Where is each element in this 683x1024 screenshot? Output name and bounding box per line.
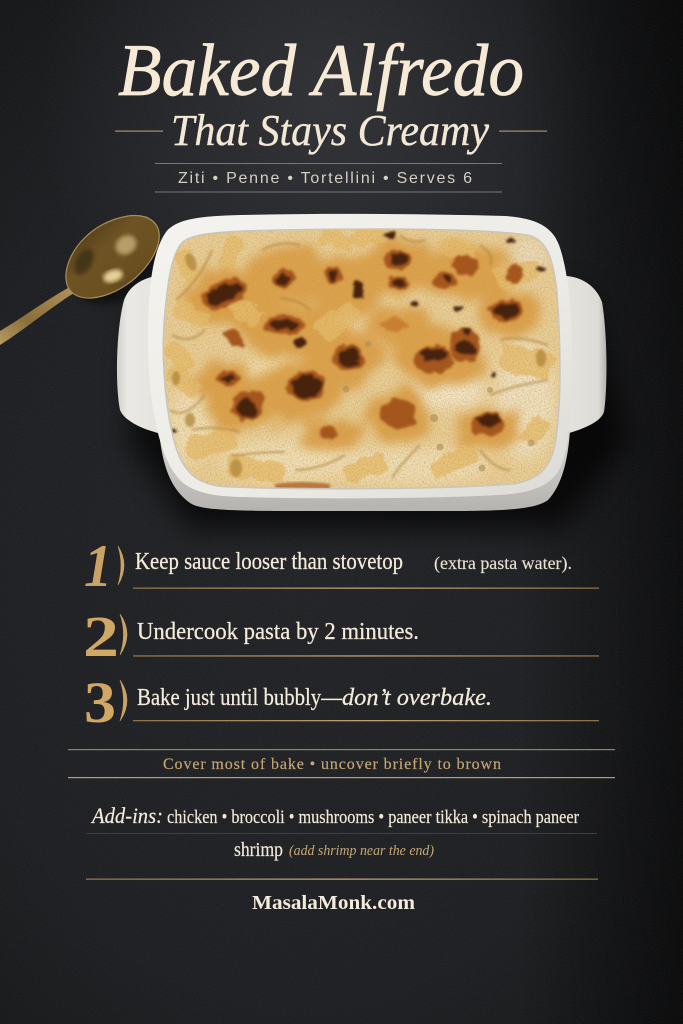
bracket 1 — [118, 546, 124, 585]
sauce bubbles — [342, 341, 534, 472]
browned bottom edge — [275, 482, 330, 490]
title line: Baked Alfredo: Baked Alfredo — [118, 30, 524, 112]
step 3 — [84, 670, 599, 735]
golden crust — [184, 238, 540, 452]
add-ins list: chicken • broccoli • mushrooms • paneer tikka • spinach paneer — [167, 807, 580, 828]
step 2 text: Undercook pasta by 2 minutes. — [137, 618, 419, 645]
dish rim — [148, 214, 572, 498]
dish shadow — [130, 290, 628, 528]
baking tip band: Cover most of bake • uncover briefly to brown — [163, 756, 501, 773]
step 1 — [84, 533, 599, 599]
crumb texture — [155, 222, 567, 494]
pasta tubes — [162, 225, 554, 485]
title — [115, 30, 547, 155]
right handle — [566, 276, 606, 434]
dish front wall — [160, 430, 570, 511]
baking dish with pasta — [117, 214, 628, 528]
step 1 note: (extra pasta water). — [434, 553, 572, 573]
step 3 emphasis: don’t overbake. — [342, 685, 492, 711]
rim inner edge — [164, 230, 559, 488]
add-ins — [86, 803, 597, 861]
step 2 — [83, 604, 599, 669]
left handle — [117, 275, 162, 434]
number 2: 2 — [83, 604, 119, 669]
step 1 text: Keep sauce looser than stovetop — [135, 549, 403, 575]
browned spots — [198, 250, 524, 439]
creamy patches — [168, 237, 555, 484]
add-ins label: Add-ins: — [90, 803, 163, 828]
step 3 text: Bake just until bubbly— — [137, 685, 343, 711]
icon: gold spoon — [0, 216, 173, 345]
charred spots — [172, 232, 544, 433]
creases between pasta — [170, 235, 548, 478]
subtitle line: That Stays Creamy: That Stays Creamy — [171, 106, 489, 155]
pasta bake — [155, 222, 567, 494]
number 3: 3 — [84, 670, 116, 735]
website credit: MasalaMonk.com — [252, 892, 415, 914]
tube openings — [172, 252, 546, 477]
shrimp item: shrimp — [234, 839, 283, 861]
bracket 3 — [120, 680, 127, 721]
tagline strip: Ziti • Penne • Tortellini • Serves 6 — [178, 170, 472, 187]
number 1: 1 — [84, 533, 112, 599]
shrimp note: (add shrimp near the end) — [289, 843, 434, 859]
bracket 2 — [120, 614, 127, 655]
